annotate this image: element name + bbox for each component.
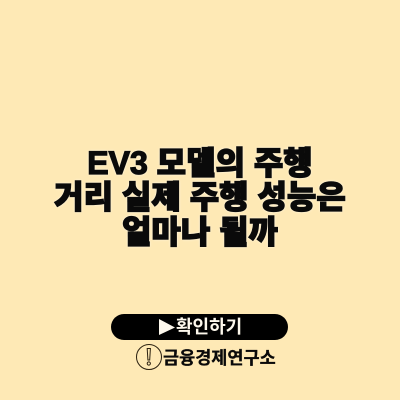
source label: 금융경제연구소 [163,348,276,368]
title line 1: EV3 모델의 주행 [87,145,313,181]
title [54,145,346,250]
button: confirm [111,314,288,340]
icon: exclamation circle [136,344,162,370]
title line 3: 얼마나 될까 [122,214,278,250]
icon: play triangle [159,319,175,335]
title line 2: 거리 실제 주행 성능은 [54,179,346,215]
button label: 확인하기 [176,317,242,337]
